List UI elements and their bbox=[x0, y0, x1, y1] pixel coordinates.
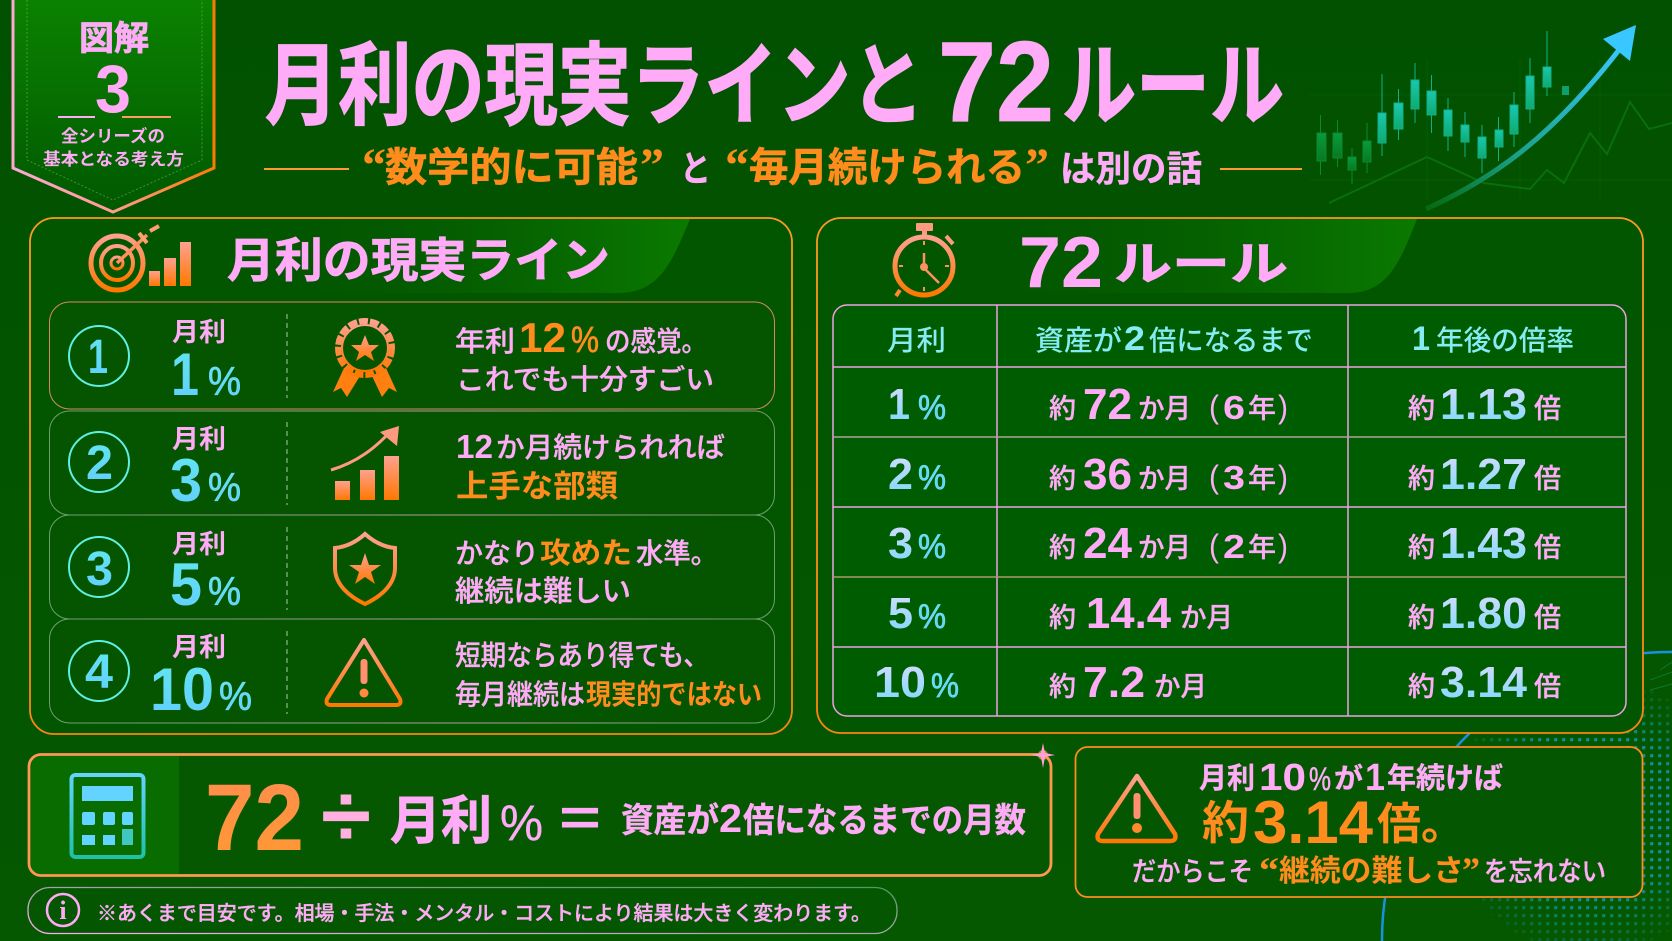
icon: info bbox=[47, 894, 79, 926]
result text: 資産が bbox=[621, 801, 719, 840]
title bbox=[265, 19, 1284, 146]
row 2: 3 bbox=[170, 447, 202, 514]
table row 2%: 2 bbox=[888, 450, 913, 499]
sparkle bbox=[1031, 743, 1055, 768]
callout line 3: を忘れない bbox=[1484, 857, 1606, 887]
result text: 倍になるまでの月数 bbox=[743, 802, 1026, 840]
subtitle: ” bbox=[640, 139, 664, 192]
table row 3%: 約 bbox=[1408, 533, 1435, 563]
row 4: 毎月継続は bbox=[455, 679, 585, 710]
table row 5%: 約 bbox=[1049, 603, 1076, 633]
callout line 1: 1 bbox=[1365, 757, 1385, 799]
row 2: 上手な部類 bbox=[456, 469, 618, 504]
table row 10%: 倍 bbox=[1534, 672, 1561, 702]
panel: 月利の現実ライン bbox=[30, 218, 792, 734]
badge caption: 基本となる考え方 bbox=[43, 149, 184, 169]
callout line 3: ” bbox=[1462, 850, 1480, 890]
table row 3%: 24 bbox=[1083, 519, 1133, 568]
table row 10%: か月 bbox=[1154, 672, 1207, 702]
table row 5%: 1.80 bbox=[1440, 589, 1527, 638]
title: 72 bbox=[938, 19, 1054, 146]
row 1: 年利 bbox=[455, 326, 515, 357]
row 1: 1 bbox=[88, 331, 108, 384]
subtitle: “ bbox=[725, 139, 749, 192]
callout line 1: 10 bbox=[1259, 757, 1306, 799]
table row 2% bbox=[888, 450, 1561, 499]
callout line 1: % bbox=[1309, 761, 1331, 797]
row 3: 5 bbox=[170, 551, 202, 618]
divide sign: ÷ bbox=[321, 766, 371, 865]
subtitle: 数学的に可能 bbox=[385, 146, 638, 190]
table row 3%: 倍 bbox=[1534, 533, 1561, 563]
table row 1%: 倍 bbox=[1534, 394, 1561, 424]
callout: 3.14倍 bbox=[1076, 747, 1642, 897]
row 4 bbox=[50, 619, 774, 723]
table row 10%: 約 bbox=[1049, 672, 1076, 702]
note bbox=[28, 888, 897, 934]
callout line 3: だからこそ bbox=[1132, 857, 1253, 887]
table row 2%: 年 bbox=[1248, 464, 1276, 494]
monthly rate: % bbox=[500, 795, 543, 851]
row 4: 10 bbox=[150, 656, 214, 723]
table row 10%: 10 bbox=[874, 658, 926, 707]
table row 3%: 2 bbox=[1223, 528, 1245, 565]
table row 1% bbox=[888, 380, 1561, 429]
table row 10%: % bbox=[931, 667, 959, 705]
table row 5%: 倍 bbox=[1534, 603, 1561, 633]
table row 1%: 年 bbox=[1248, 394, 1276, 424]
row 3: 水準。 bbox=[636, 538, 718, 569]
subtitle: 毎月続けられる bbox=[749, 146, 1025, 190]
table row 1%: 1.13 bbox=[1440, 380, 1527, 429]
note text: ※あくまで目安です。相場・手法・メンタル・コストにより結果は大きく変わります。 bbox=[97, 902, 871, 925]
row 2: か月続けられれば bbox=[496, 432, 725, 463]
row 3: 攻めた bbox=[540, 537, 632, 570]
table row 1%: 1 bbox=[888, 380, 910, 429]
monthly rate: 月利 bbox=[390, 793, 492, 851]
callout line 1: が bbox=[1334, 762, 1363, 794]
table header: 倍になるまで bbox=[1149, 325, 1313, 356]
row 1 bbox=[50, 302, 774, 409]
table row 3%: ( bbox=[1209, 528, 1219, 564]
table row 10% bbox=[874, 658, 1561, 707]
row 3: 3 bbox=[86, 543, 113, 596]
callout line 3: “ bbox=[1259, 850, 1279, 890]
table header bbox=[887, 320, 1574, 358]
badge caption: 全シリーズの bbox=[61, 126, 165, 146]
panel heading: 72 bbox=[1019, 223, 1103, 303]
icon: rising bars bbox=[331, 426, 399, 500]
equals sign: = bbox=[559, 789, 601, 847]
icon: shield bbox=[335, 534, 395, 604]
table row 2%: 約 bbox=[1408, 464, 1435, 494]
row 2: 2 bbox=[86, 437, 113, 490]
callout line 2: 約 bbox=[1202, 797, 1249, 849]
callout line 1 bbox=[1199, 757, 1503, 799]
panel heading: 月利の現実ライン bbox=[227, 234, 610, 287]
row 4: 4 bbox=[85, 646, 113, 699]
table row 1%: 72 bbox=[1083, 380, 1132, 429]
table row 1%: か月 bbox=[1138, 394, 1191, 424]
row 3 bbox=[50, 515, 774, 619]
row 3: % bbox=[208, 570, 241, 614]
table row 3%: ) bbox=[1278, 528, 1288, 564]
icon: medal bbox=[333, 321, 397, 397]
icon: target with bars bbox=[91, 226, 191, 290]
table row 3%: 3 bbox=[888, 519, 913, 568]
table row 1%: ) bbox=[1278, 389, 1288, 425]
table row 3%: 約 bbox=[1049, 533, 1076, 563]
icon: calculator bbox=[72, 775, 144, 857]
row 2 bbox=[50, 411, 774, 515]
table header: 月利 bbox=[887, 325, 946, 356]
table bbox=[833, 305, 1626, 716]
table row 5%: 14.4 bbox=[1086, 589, 1172, 638]
badge number: 3 bbox=[95, 51, 131, 127]
row 3: 月利 bbox=[172, 529, 226, 559]
table row 5%: か月 bbox=[1180, 603, 1233, 633]
icon: stopwatch bbox=[895, 223, 953, 296]
subtitle bbox=[264, 139, 1302, 192]
table row 2%: 3 bbox=[1223, 459, 1245, 496]
row 1: 1 bbox=[171, 341, 199, 408]
table row 3%: % bbox=[918, 528, 946, 566]
table header: 資産が bbox=[1035, 325, 1122, 356]
row 2: 月利 bbox=[172, 424, 226, 454]
badge heading: 図解 bbox=[79, 20, 149, 58]
monthly rate bbox=[390, 793, 543, 851]
result text bbox=[621, 797, 1026, 841]
row 4: 短期ならあり得ても、 bbox=[455, 640, 709, 671]
subtitle: と bbox=[680, 148, 711, 189]
row 3: 継続は難しい bbox=[455, 575, 631, 608]
icon: warning bbox=[1098, 776, 1175, 841]
table row 5% bbox=[888, 589, 1561, 638]
table row 5%: 5 bbox=[888, 589, 913, 638]
table row 2%: ) bbox=[1278, 459, 1288, 495]
subtitle: ” bbox=[1025, 139, 1049, 192]
table row 1%: 6 bbox=[1223, 389, 1245, 426]
row 2: % bbox=[208, 466, 241, 510]
table row 2%: 36 bbox=[1083, 450, 1132, 499]
callout line 1: 月利 bbox=[1199, 762, 1255, 795]
row 1: % bbox=[571, 319, 599, 360]
table row 1%: 約 bbox=[1049, 394, 1076, 424]
table row 5%: % bbox=[918, 598, 946, 636]
row 1: % bbox=[208, 360, 241, 404]
panel: 72ルール bbox=[817, 218, 1643, 733]
panel: 72ルール: ルール bbox=[1114, 238, 1288, 290]
formula 72: 72 bbox=[205, 765, 304, 871]
table header: 1 bbox=[1412, 320, 1430, 358]
decoration: candlestick chart with rising arrow bbox=[1310, 25, 1672, 209]
table header: 年後の倍率 bbox=[1436, 325, 1574, 356]
decoration: globe with dots bbox=[1382, 652, 1672, 941]
row 3: かなり bbox=[455, 538, 539, 569]
table row 2%: か月 bbox=[1138, 464, 1191, 494]
badge: 図解3 bbox=[13, 0, 214, 212]
table row 3%: 1.43 bbox=[1440, 519, 1527, 568]
row 4: 現実的ではない bbox=[586, 679, 762, 710]
table row 2%: 約 bbox=[1049, 464, 1076, 494]
subtitle: は別の話 bbox=[1060, 148, 1202, 189]
panel: formula bbox=[29, 743, 1055, 876]
icon: warning bbox=[326, 640, 400, 705]
table row 10%: 3.14 bbox=[1440, 658, 1528, 707]
callout line 2: 3.14 bbox=[1253, 789, 1374, 856]
table row 2%: % bbox=[918, 459, 946, 497]
callout line 3: 継続の難しさ bbox=[1279, 855, 1464, 888]
table row 1%: ( bbox=[1209, 389, 1219, 425]
row 1: の感覚。 bbox=[605, 326, 707, 357]
row 4: 月利 bbox=[172, 632, 226, 662]
row 1: 12 bbox=[519, 314, 566, 361]
row 2: 12 bbox=[456, 428, 493, 465]
result text: 2 bbox=[719, 797, 742, 841]
title: ルール bbox=[1062, 37, 1284, 137]
table row 3% bbox=[888, 519, 1561, 568]
table row 1%: 約 bbox=[1408, 394, 1435, 424]
table row 3%: か月 bbox=[1138, 533, 1191, 563]
subtitle: “ bbox=[362, 139, 386, 192]
icon: info: i bbox=[59, 896, 67, 925]
table row 2%: ( bbox=[1209, 459, 1219, 495]
table row 10%: 7.2 bbox=[1083, 658, 1145, 707]
title: 月利の現実ラインと bbox=[265, 37, 924, 137]
badge caption bbox=[43, 126, 184, 169]
table header: 2 bbox=[1124, 320, 1145, 358]
table row 1%: % bbox=[918, 389, 946, 427]
table row 3%: 年 bbox=[1248, 533, 1276, 563]
callout line 1: 年続けば bbox=[1387, 762, 1503, 795]
row 4: % bbox=[219, 675, 252, 719]
row 1: 月利 bbox=[172, 317, 226, 347]
table row 10%: 約 bbox=[1408, 672, 1435, 702]
callout line 2 bbox=[1202, 789, 1465, 856]
callout line 3 bbox=[1132, 850, 1606, 890]
table row 2%: 1.27 bbox=[1440, 450, 1527, 499]
table row 2%: 倍 bbox=[1534, 464, 1561, 494]
table row 5%: 約 bbox=[1408, 603, 1435, 633]
callout line 2: 倍。 bbox=[1377, 800, 1465, 849]
row 1: これでも十分すごい bbox=[456, 364, 714, 395]
